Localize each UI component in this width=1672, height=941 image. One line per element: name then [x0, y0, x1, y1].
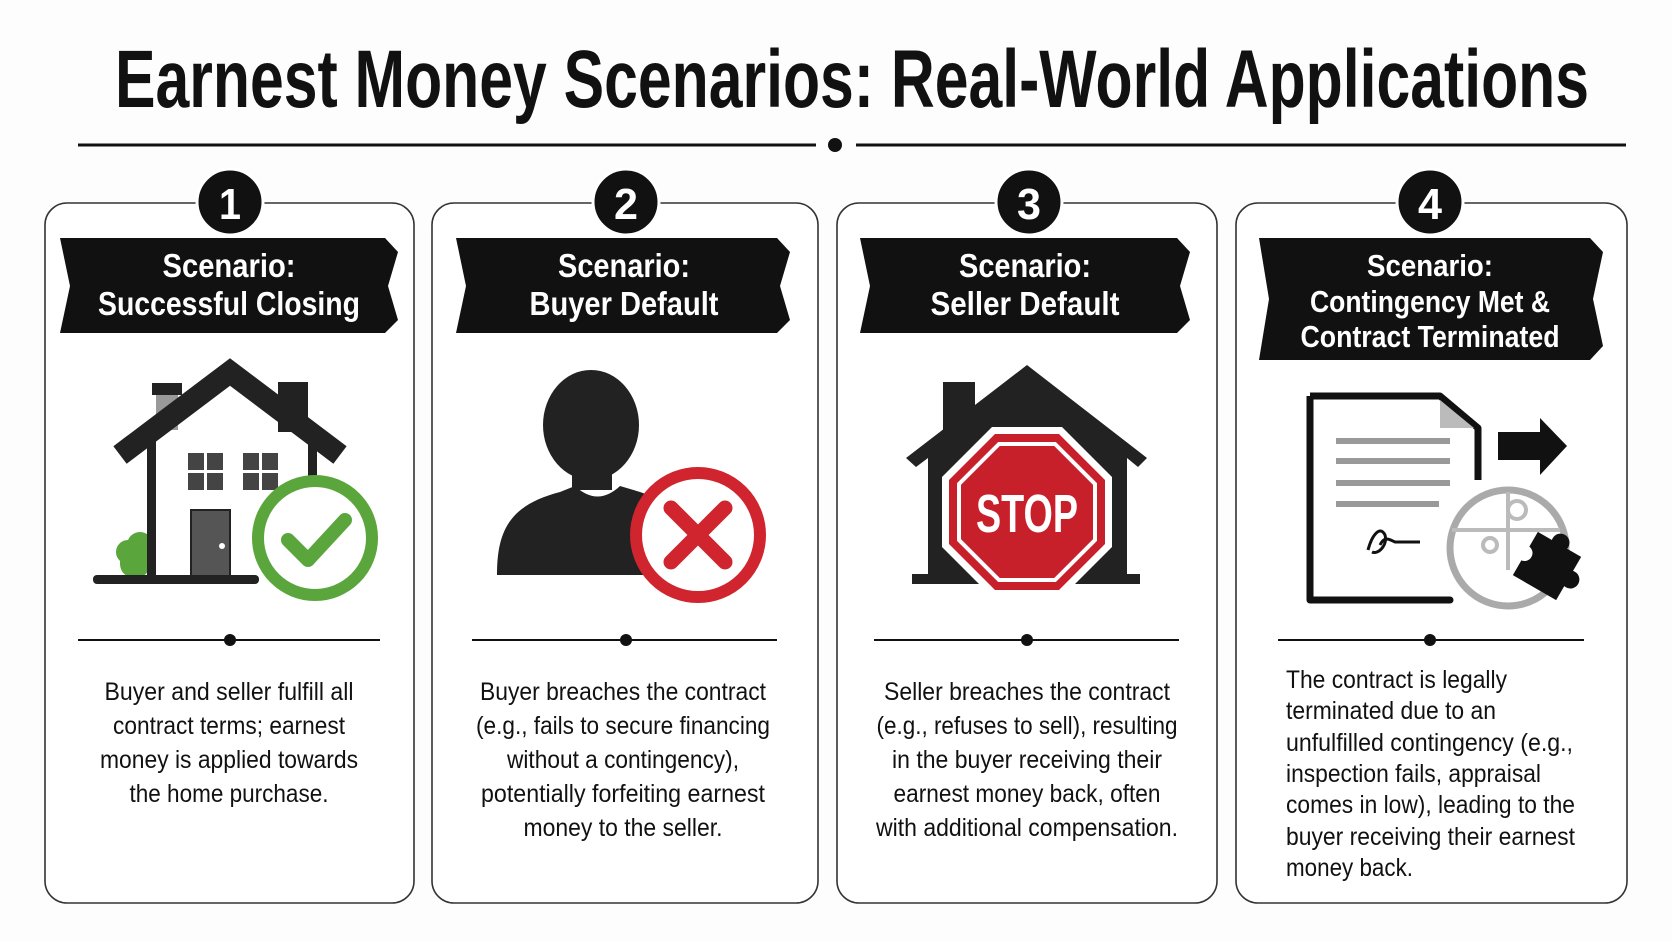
banner: Successful Closing: [98, 285, 360, 322]
description 2: potentially forfeiting earnest: [481, 780, 765, 808]
description 3: with additional compensation.: [875, 814, 1178, 842]
description 4: comes in low), leading to the: [1286, 791, 1575, 819]
description 3: earnest money back, often: [894, 780, 1160, 808]
panel: successful closing: [45, 169, 414, 903]
description 4: inspection fails, appraisal: [1286, 760, 1541, 788]
banner: Seller Default: [930, 285, 1120, 322]
description 3: [875, 678, 1178, 842]
description 1: Buyer and seller fulfill all: [104, 678, 354, 706]
description 1: [100, 678, 358, 808]
description 4: money back.: [1286, 854, 1413, 882]
icon: house with stop sign: [906, 365, 1147, 597]
number badge 3: [996, 169, 1062, 235]
description 4: [1286, 666, 1575, 882]
icon: person with red X: [497, 370, 760, 597]
panel: seller default: [837, 169, 1217, 903]
banner: Scenario:: [959, 247, 1091, 284]
number badge 4: 4: [1418, 180, 1443, 229]
description 2: money to the seller.: [524, 814, 722, 842]
description 3: (e.g., refuses to sell), resulting: [876, 712, 1178, 740]
number badge 4: [1397, 169, 1463, 235]
banner: Scenario:: [1367, 248, 1493, 283]
banner: [60, 238, 398, 333]
banner: [1259, 238, 1603, 360]
icon: house with check: [93, 372, 372, 595]
description 2: without a contingency),: [506, 746, 739, 774]
icon: document, arrow, puzzle: [1310, 396, 1596, 606]
number badge 2: 2: [614, 180, 638, 229]
number badge 1: 1: [219, 180, 241, 229]
banner: Contract Terminated: [1300, 319, 1560, 354]
number badge 3: 3: [1017, 180, 1041, 229]
description 2: (e.g., fails to secure financing: [476, 712, 770, 740]
icon: house with stop sign: STOP: [976, 484, 1078, 544]
description 4: The contract is legally: [1286, 666, 1507, 694]
panel: contingency met: [1236, 169, 1627, 903]
panel: buyer default: [432, 169, 818, 903]
banner: Buyer Default: [530, 285, 718, 322]
description 2: [476, 678, 770, 842]
description 1: the home purchase.: [130, 780, 328, 808]
description 4: terminated due to an: [1286, 697, 1496, 725]
description 1: money is applied towards: [100, 746, 358, 774]
number badge 2: [593, 169, 659, 235]
description 2: Buyer breaches the contract: [480, 678, 766, 706]
banner: Scenario:: [558, 247, 690, 284]
description 4: buyer receiving their earnest: [1286, 823, 1575, 851]
description 3: Seller breaches the contract: [884, 678, 1170, 706]
description 1: contract terms; earnest: [113, 712, 345, 740]
number badge 1: [197, 169, 263, 235]
banner: Scenario:: [162, 247, 296, 284]
description 3: in the buyer receiving their: [892, 746, 1162, 774]
banner: [456, 238, 790, 333]
banner: [860, 238, 1190, 333]
banner: Contingency Met &: [1310, 284, 1550, 319]
description 4: unfulfilled contingency (e.g.,: [1286, 729, 1573, 757]
